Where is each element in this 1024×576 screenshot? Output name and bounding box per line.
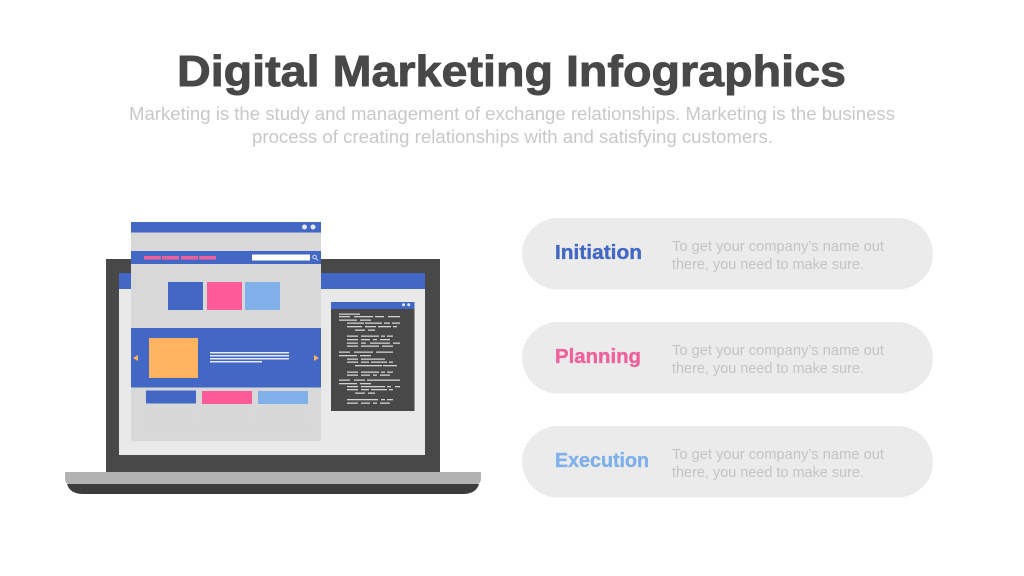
faint text rows: [146, 412, 308, 431]
Execution description: [672, 447, 884, 481]
Initiation description: To get your company’s name out: [672, 239, 884, 255]
Planning description: To get your company’s name out: [672, 343, 884, 359]
subtitle text: Marketing is the study and management of exchange relationships. Marketing is the business: [129, 103, 895, 124]
code window: [331, 302, 414, 411]
navigation bar: [131, 251, 321, 264]
panel: Initiation: [522, 218, 933, 290]
Execution description: To get your company’s name out: [672, 447, 884, 463]
colour squares: [168, 282, 280, 310]
laptop lid: [106, 259, 440, 473]
buttons: [146, 390, 308, 404]
subtitle text: process of creating relationships with and satisfying customers.: [252, 126, 773, 147]
panel: Initiation: Initiation: [555, 242, 642, 264]
Planning description: [672, 343, 884, 377]
panel: Planning: Planning: [555, 346, 641, 368]
code lines: [339, 314, 400, 404]
Planning description: there, you need to make sure.: [672, 361, 864, 377]
title: Digital Marketing Infographics: [177, 47, 846, 96]
panel: Planning: [522, 322, 933, 394]
banner: [131, 328, 321, 388]
Initiation description: [672, 239, 884, 273]
laptop base: [65, 472, 481, 494]
subtitle text: [129, 103, 895, 147]
Execution description: there, you need to make sure.: [672, 465, 864, 481]
Initiation description: there, you need to make sure.: [672, 257, 864, 273]
browser title bar: [131, 222, 321, 232]
panel: Execution: [522, 426, 933, 498]
laptop screen: [119, 273, 425, 455]
panel: Execution: Execution: [555, 450, 649, 472]
laptop illustration: [65, 222, 481, 494]
browser window: [131, 222, 321, 441]
